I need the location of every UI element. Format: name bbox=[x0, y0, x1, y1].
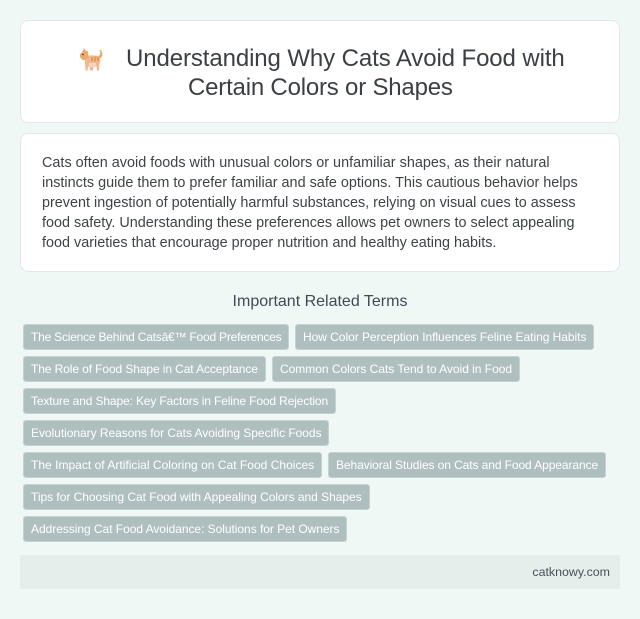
tag 4 bbox=[272, 356, 520, 382]
tag 5 bbox=[23, 388, 336, 414]
tag 2 bbox=[295, 324, 594, 350]
text block: description: food safety. Understanding these preferences allows pet owners to select appealing bbox=[42, 215, 575, 231]
heading: related terms: Important Related Terms bbox=[233, 293, 407, 310]
text block: description: instincts guide them to prefer familiar and safe options. This cautious behavior helps bbox=[42, 175, 578, 191]
tag 1: The Science Behind Catsâ€™ Food Preferences bbox=[31, 330, 281, 344]
tag 10: Addressing Cat Food Avoidance: Solutions for Pet Owners bbox=[31, 522, 339, 536]
title bbox=[126, 45, 565, 101]
footer bbox=[20, 555, 620, 589]
tag 7 bbox=[23, 452, 322, 478]
tag 6: Evolutionary Reasons for Cats Avoiding Specific Foods bbox=[31, 426, 321, 440]
tag 10 bbox=[23, 516, 347, 542]
panel: description card bbox=[20, 133, 620, 272]
title: Understanding Why Cats Avoid Food with bbox=[126, 45, 565, 72]
tag 9 bbox=[23, 484, 370, 510]
tag 3: The Role of Food Shape in Cat Acceptance bbox=[31, 362, 258, 376]
tag 3 bbox=[23, 356, 266, 382]
footer text: catknowy.com bbox=[532, 565, 610, 579]
text block: description: food varieties that encourage proper nutrition and healthy eating habits. bbox=[42, 235, 496, 251]
tag 5: Texture and Shape: Key Factors in Feline Food Rejection bbox=[31, 394, 328, 408]
tag 9: Tips for Choosing Cat Food with Appealing Colors and Shapes bbox=[31, 490, 362, 504]
tag 8 bbox=[328, 452, 606, 478]
tag list bbox=[23, 324, 606, 542]
text block: description: Cats often avoid foods with unusual colors or unfamiliar shapes, as their natural bbox=[42, 155, 550, 171]
tag 6 bbox=[23, 420, 329, 446]
title: Certain Colors or Shapes bbox=[188, 74, 453, 101]
tag 4: Common Colors Cats Tend to Avoid in Food bbox=[280, 362, 512, 376]
tag 7: The Impact of Artificial Coloring on Cat Food Choices bbox=[31, 458, 314, 472]
tag 8: Behavioral Studies on Cats and Food Appearance bbox=[336, 458, 598, 472]
panel: title card bbox=[20, 20, 620, 123]
text block: description bbox=[42, 155, 578, 251]
tag 2: How Color Perception Influences Feline Eating Habits bbox=[303, 330, 586, 344]
text block: description: prevent ingestion of potentially harmful substances, relying on visual cues to assess bbox=[42, 195, 576, 211]
tag 1 bbox=[23, 324, 289, 350]
icon: cat bbox=[80, 48, 102, 70]
